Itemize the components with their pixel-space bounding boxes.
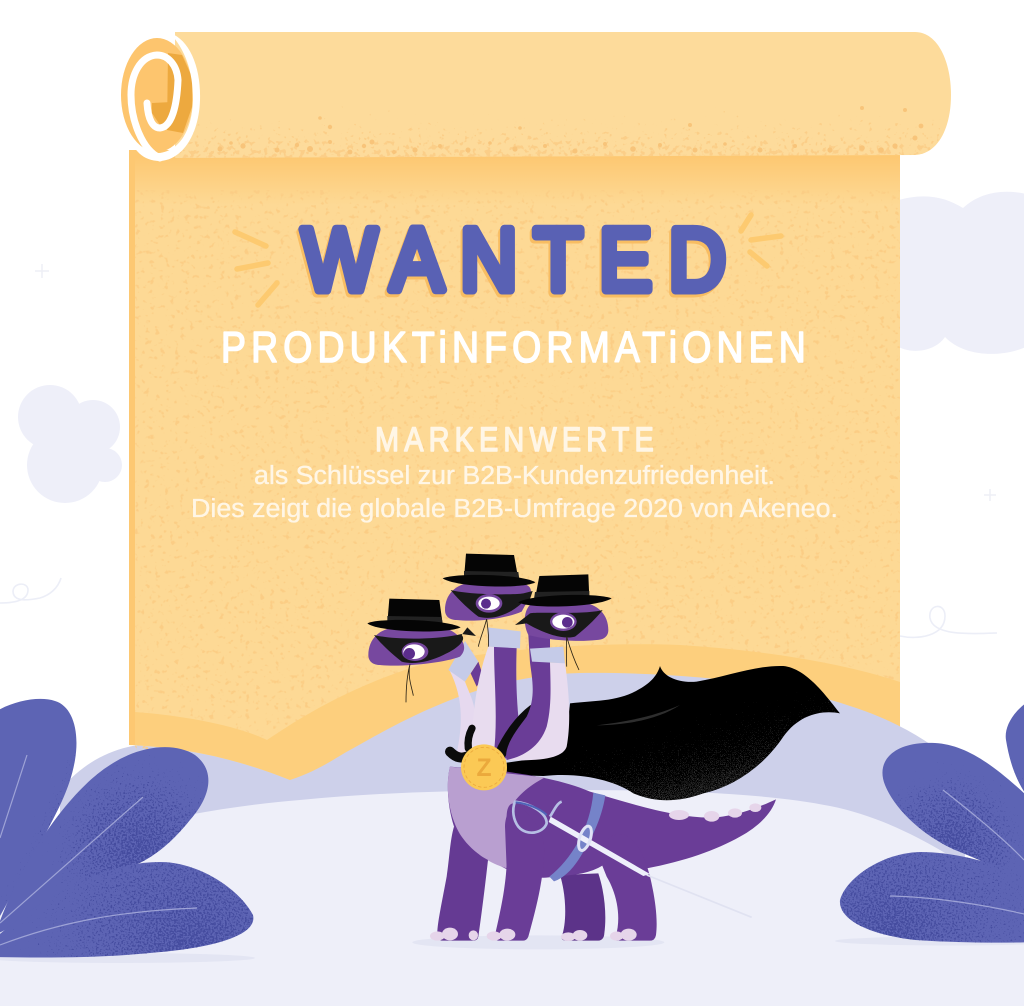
neck centre	[472, 627, 521, 758]
leaf middle	[882, 743, 1024, 885]
sword	[513, 802, 752, 917]
cloud: left	[18, 385, 122, 503]
neck right	[506, 635, 569, 760]
hill: centre lavender	[290, 673, 965, 860]
leaf 2	[0, 747, 208, 935]
title burst: right	[741, 215, 781, 266]
squiggle: left	[0, 578, 61, 603]
sword buckle	[576, 825, 594, 852]
scroll left edge	[129, 150, 135, 745]
head left	[367, 599, 476, 702]
roll splatter dots	[218, 106, 923, 154]
sword guard	[513, 802, 562, 833]
heading: WANTED shadow: WANTED	[300, 213, 724, 312]
front leg outer	[437, 827, 488, 941]
leaf top	[1006, 700, 1024, 800]
cape	[507, 666, 840, 800]
roll speckles	[175, 85, 950, 158]
scroll roll	[175, 32, 951, 158]
collar	[450, 710, 533, 758]
left plant shadow	[0, 953, 255, 963]
head right	[515, 574, 612, 670]
leaf 3	[0, 862, 253, 958]
head centre	[443, 554, 535, 647]
body text line 1: als Schlüssel zur B2B-Kundenzufriedenheit.	[254, 462, 775, 490]
body and tail	[448, 767, 776, 878]
toes	[430, 928, 637, 941]
cloud: right	[895, 192, 1024, 354]
belt	[549, 793, 605, 881]
plant: left	[0, 699, 253, 958]
decorative plus: right	[984, 489, 996, 501]
dragon character	[367, 554, 840, 949]
medal	[461, 744, 507, 790]
neck left	[448, 641, 483, 757]
front leg inner	[495, 803, 544, 941]
leaf 1	[0, 699, 76, 925]
scroll body	[129, 150, 900, 800]
leaf bottom	[840, 852, 1024, 943]
hill: left lavender	[60, 743, 310, 830]
subheading: MARKENWERTE: MARKENWERTE	[375, 420, 654, 459]
inner back leg	[560, 873, 605, 941]
dragon shadow	[412, 935, 664, 949]
heading: WANTED: WANTED	[302, 210, 726, 309]
sword blade	[549, 817, 650, 876]
sword tip shadow	[647, 875, 752, 917]
roll end	[121, 33, 200, 161]
squiggle: right	[900, 606, 997, 637]
body text line 2: Dies zeigt die globale B2B-Umfrage 2020 von Akeneo.	[191, 495, 838, 523]
scroll	[121, 32, 951, 800]
chest	[448, 767, 545, 868]
scroll lower fold	[135, 644, 900, 800]
decorative plus: left	[35, 264, 49, 278]
right plant shadow	[835, 936, 1024, 946]
medal: Z	[476, 755, 492, 782]
title burst: left	[235, 232, 277, 305]
tail spikes	[669, 803, 761, 822]
back leg	[600, 834, 657, 941]
plant: right	[840, 700, 1024, 943]
subheading: PRODUKTINFORMATIONEN: PRODUKTiNFORMATiONEN	[221, 322, 806, 372]
scroll body speckles	[135, 190, 900, 750]
ground	[0, 790, 1024, 1006]
